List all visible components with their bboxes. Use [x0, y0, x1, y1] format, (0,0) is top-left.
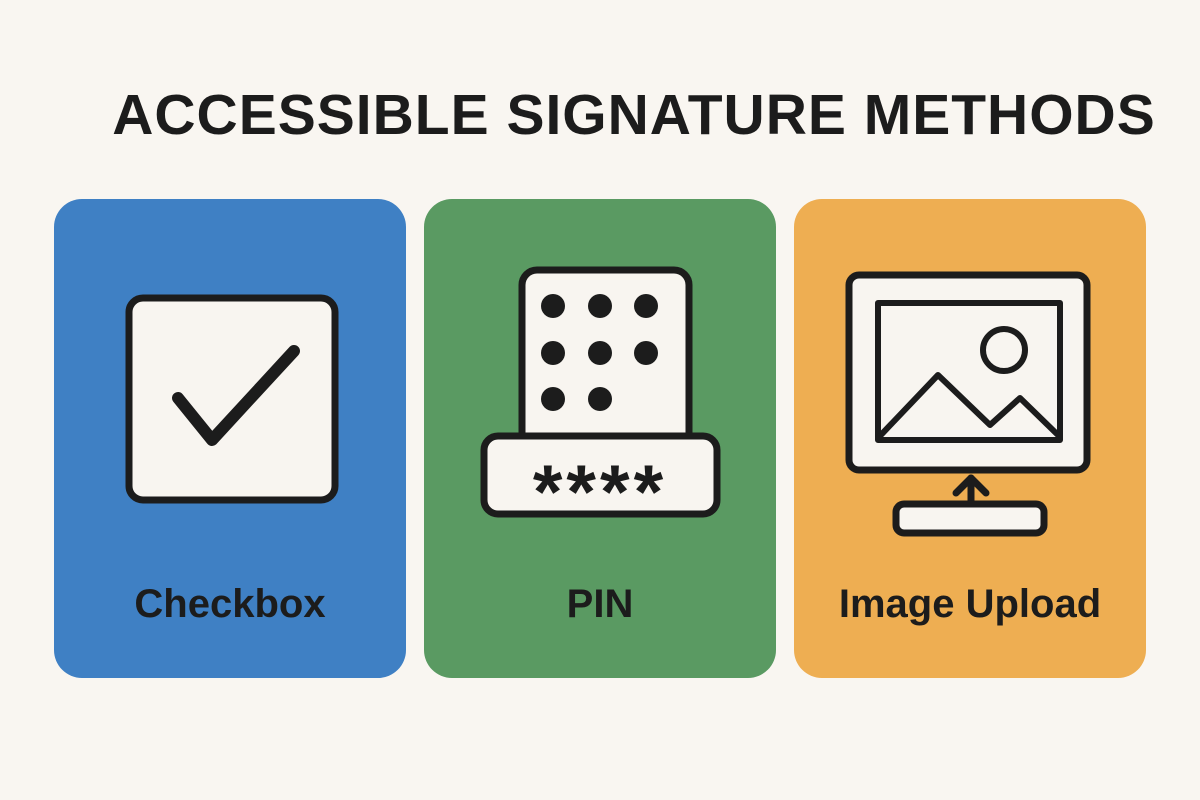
label: checkbox: Checkbox: [134, 582, 326, 626]
icon: image upload: [849, 275, 1087, 533]
panel: image upload: [794, 199, 1146, 678]
icon: checkbox: [129, 298, 335, 500]
icon: pin keypad: ****: [533, 450, 667, 535]
panel: pin: [424, 199, 776, 678]
icon: pin keypad: [484, 270, 717, 535]
title: ACCESSIBLE SIGNATURE METHODS: [112, 83, 1156, 147]
label: image upload: Image Upload: [839, 582, 1101, 626]
panel: checkbox: [54, 199, 406, 678]
label: pin: PIN: [567, 582, 633, 626]
